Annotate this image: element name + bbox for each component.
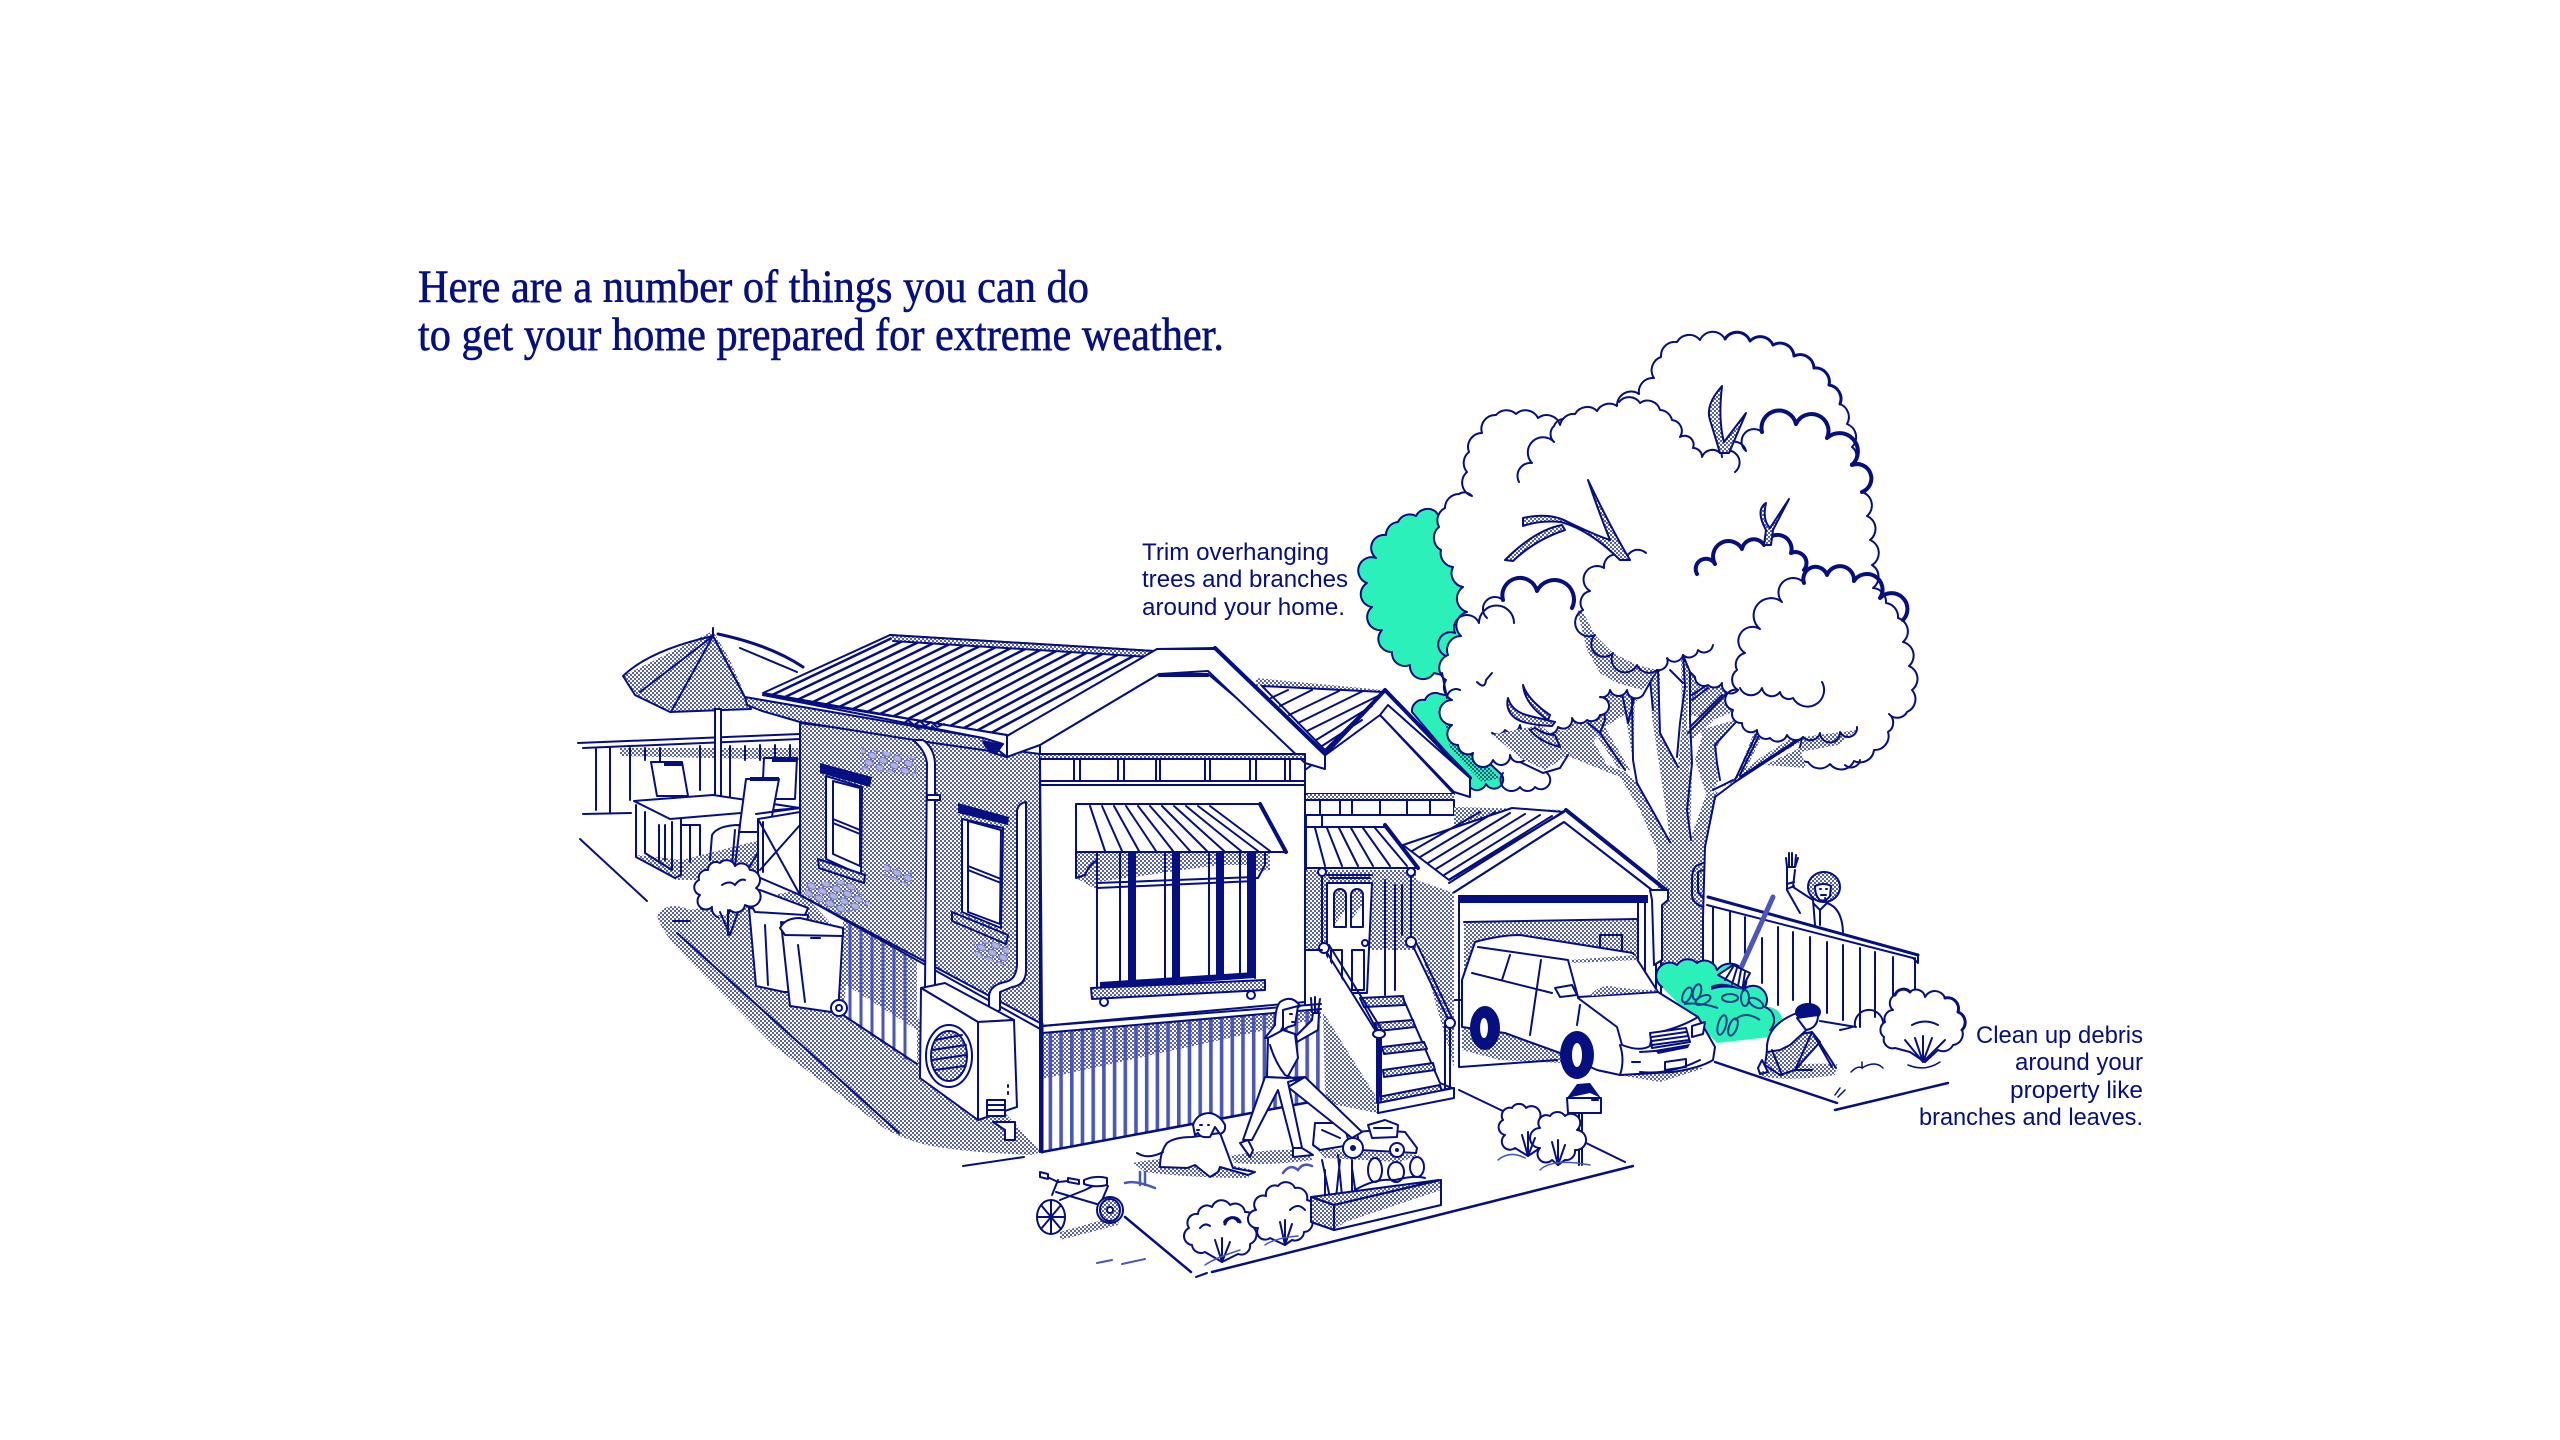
dog [1133,1113,1255,1178]
right fence [1707,897,1918,1027]
gable front [1007,648,1325,769]
tree trunk and limbs [1545,653,1807,975]
illustration: house, tree and yard [578,332,1965,1277]
front door and porch [1306,868,1416,995]
callout: clean up debris: Clean up debris [1976,1022,2143,1049]
porch roof [1306,825,1418,868]
bay window awning [1076,804,1286,890]
callout: clean up debris: branches and leaves. [1919,1104,2143,1131]
neighbour waving [1786,853,1843,932]
car rear wheel [1470,1006,1500,1050]
callout: trim trees: trees and branches [1142,566,1348,593]
car front wheel [1560,1031,1594,1079]
car shadow [1462,1020,1705,1082]
footpath lines [580,839,1024,1166]
canopy lobe outlines [1438,397,1860,767]
garage [1403,807,1668,1070]
title [418,261,1224,361]
ground shadow [657,890,1041,1155]
callout: clean up debris: around your [2015,1049,2143,1076]
tree canopy [1434,332,1918,773]
branch top [1709,386,1746,453]
callout: trim trees: around your home. [1142,594,1345,621]
main roof [763,635,1154,736]
rear gable of house [1256,678,1470,870]
side window 1 [818,763,872,883]
title: Here are a number of things you can do [418,261,1089,313]
bins [746,890,847,1016]
house side wall [800,723,1042,1024]
callout: clean up debris [1919,1022,2143,1131]
shrub one [1184,1200,1257,1265]
callout: clean up debris: property like [2010,1077,2143,1104]
bay window [1091,853,1265,1006]
umbrella [623,628,803,806]
small left shrub [694,860,761,937]
side window 2 [952,803,1009,944]
planter box [1311,1155,1441,1230]
frieze on front wall [1040,754,1305,1005]
title: to get your home prepared for extreme weather. [418,309,1224,361]
air conditioner [920,983,1017,1140]
grass tufts by fence [1835,1062,1940,1097]
callout: trim trees [1142,539,1348,621]
canopy heavy outlines [1502,332,1907,620]
branch left [1523,480,1630,560]
branch left fork [1505,525,1565,561]
crouching person [1758,1003,1837,1079]
lawn tufts [1125,1165,1312,1188]
side weatherboards [800,895,1042,1064]
mint bush behind house [1412,693,1503,790]
shrub two [1248,1182,1315,1245]
mailbox [1567,1083,1601,1165]
outdoor table and chairs [634,758,800,880]
canopy branch shadows [1492,610,1857,770]
lawn mower [1288,1077,1420,1162]
balustrade [756,808,800,895]
branch lower left [1507,685,1568,773]
front wall [1040,745,1322,1152]
mint bush by the car [1656,959,1783,1043]
rake [1718,897,1773,988]
tricycle [1037,1172,1123,1240]
back fence [578,734,800,814]
gutter and downpipes [745,695,1026,1013]
woman mowing [1240,997,1320,1157]
shrubs by mailbox [1498,1104,1590,1170]
large right shrub [1840,989,1965,1062]
callout: trim trees: Trim overhanging [1142,539,1329,566]
front steps [1306,880,1455,1113]
branch right [1760,499,1789,545]
woman shadow [1230,1150,1312,1164]
yard boundary lines [1097,1060,1948,1277]
car [1462,935,1715,1079]
small hanging foliage [1501,773,1550,791]
front weatherboards [1042,1004,1321,1152]
mint tree behind [1358,509,1500,690]
